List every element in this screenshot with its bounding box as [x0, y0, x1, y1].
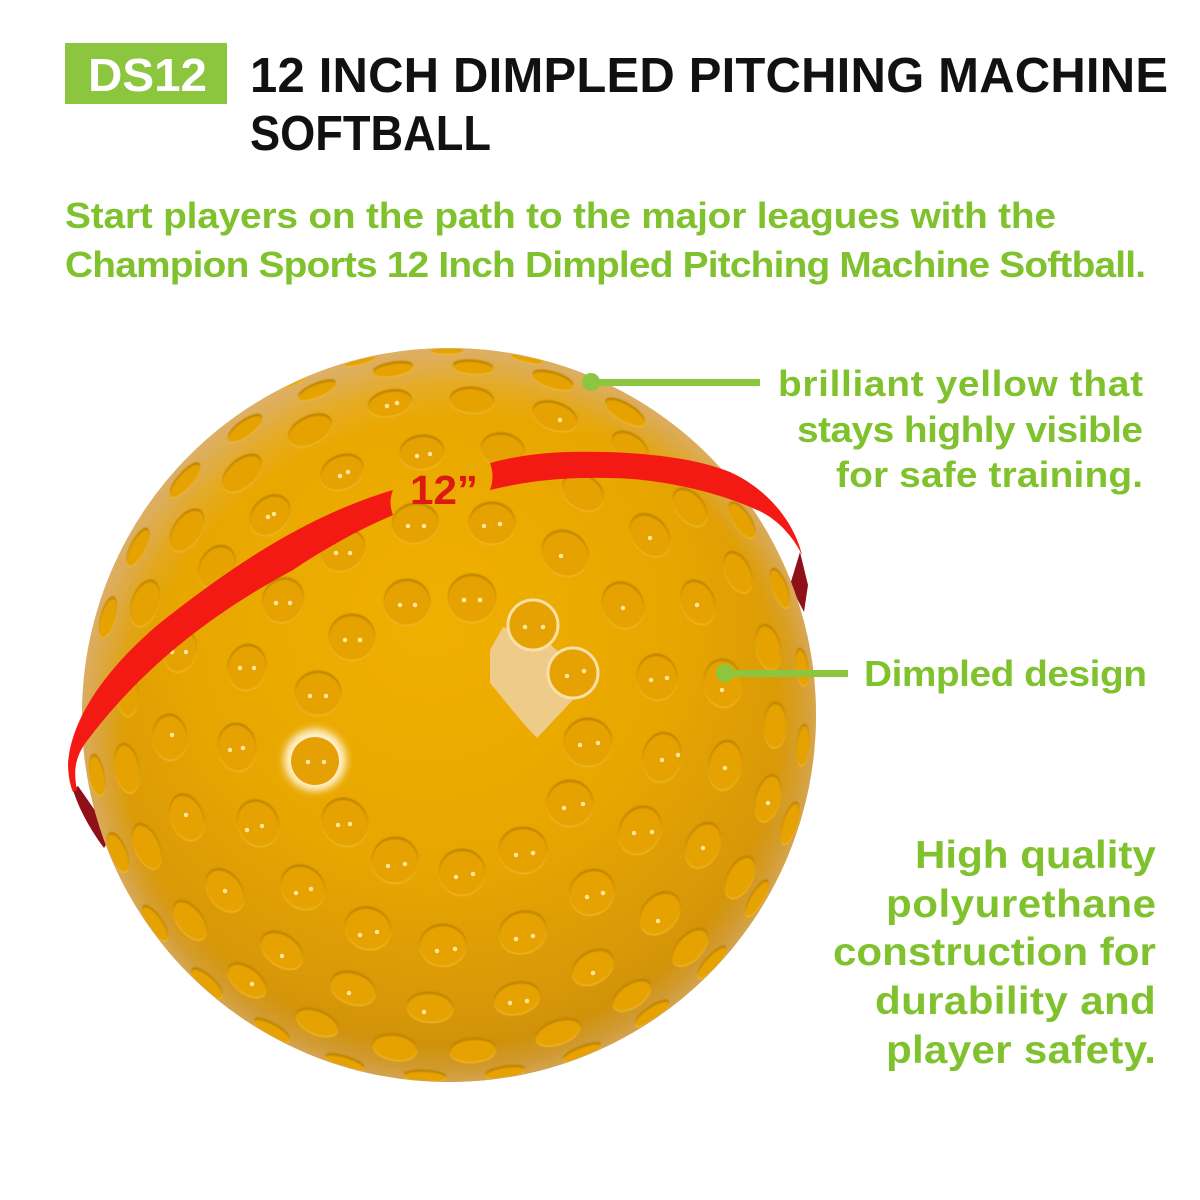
callout: polyurethane construction: polyurethane — [886, 881, 1156, 926]
highlighted dimple upper — [508, 600, 558, 650]
callout: dimpled design — [716, 653, 1147, 694]
callout: polyurethane construction: High quality — [915, 832, 1156, 877]
upper-left rim tan sheen — [82, 348, 816, 1082]
softball illustration with measuring band — [68, 346, 816, 1084]
highlighted dimple lower — [548, 648, 598, 698]
badge: DS12 — [65, 43, 227, 104]
intro text — [65, 195, 1146, 285]
band: front right section — [490, 452, 802, 555]
infographic canvas — [65, 43, 1166, 1082]
title — [250, 49, 1168, 161]
title: 12 INCH DIMPLED PITCHING MACHINE — [250, 49, 1168, 103]
intro text: Start players on the path to the major leagues with the — [65, 195, 1056, 236]
ball body — [82, 348, 816, 1082]
band label: 12” — [410, 467, 478, 513]
dimple specular dots — [172, 403, 768, 1012]
callout: polyurethane construction: durability and — [875, 978, 1156, 1023]
leader line — [716, 664, 848, 682]
intro text: Champion Sports 12 Inch Dimpled Pitching Machine Softball. — [65, 244, 1146, 285]
callout text: stays highly visible — [797, 409, 1143, 450]
callout text — [778, 363, 1144, 495]
badge: DS12: DS12 — [88, 49, 207, 101]
band: front left section — [68, 490, 393, 792]
callout text: Dimpled design — [864, 653, 1147, 694]
band: rear dark sections behind ball — [73, 552, 808, 848]
callout: polyurethane construction — [833, 832, 1156, 1072]
callout text: brilliant yellow that — [778, 363, 1144, 404]
callout: polyurethane construction: player safety. — [886, 1027, 1156, 1072]
callout: brilliant yellow — [582, 363, 1144, 495]
leader line — [582, 373, 760, 391]
glossy highlight patch — [490, 627, 592, 738]
dimples — [87, 346, 811, 1084]
callout: polyurethane construction: construction for — [833, 929, 1156, 974]
white glare around dimple — [284, 729, 346, 791]
ball rim lightening — [82, 348, 816, 1082]
callout text: for safe training. — [836, 454, 1143, 495]
title: SOFTBALL — [250, 107, 491, 161]
